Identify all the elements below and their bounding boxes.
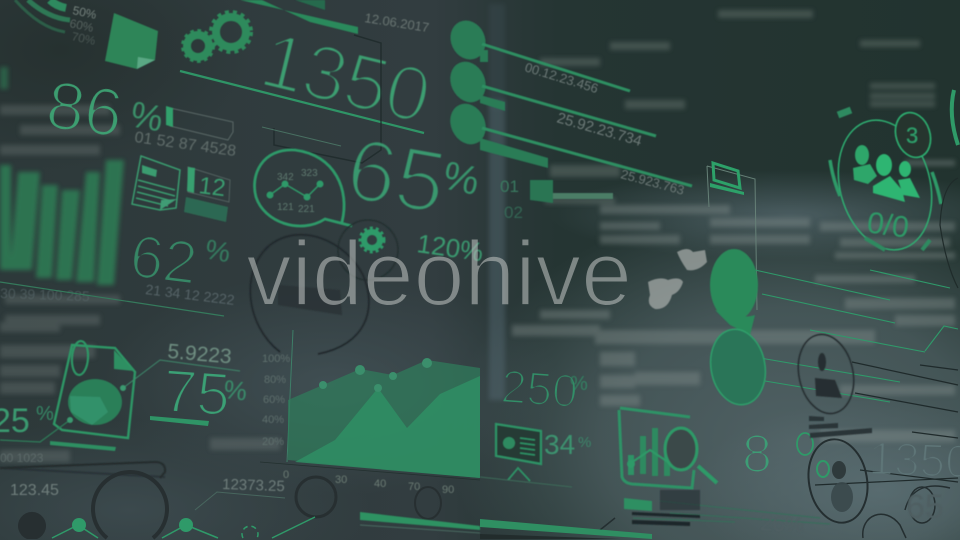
label 5.9223: 5.9223 [167, 340, 233, 369]
gear and ring [338, 220, 398, 280]
date label: 12.06.2017 [364, 10, 430, 35]
gauge percent labels [68, 3, 98, 48]
time label lower left: 30 39 100 285 [0, 285, 90, 304]
faint numbers bottom right: 26% [760, 510, 805, 537]
chart x axis labels: 90 [442, 484, 454, 496]
time labels bottom left: 123.45 [10, 482, 59, 499]
chart x axis labels [283, 469, 454, 496]
label 25 percent [0, 402, 54, 440]
ring gauge fragment, top left [15, 0, 70, 32]
time label lower left [0, 281, 236, 308]
icon: magnifier over bar chart [619, 408, 717, 488]
big number 62 percent: % [203, 233, 233, 268]
big number 62 percent [126, 222, 233, 297]
dark status bars [809, 416, 872, 438]
time code label: 01 52 87 4528 [133, 129, 237, 160]
chart x axis labels: 30 [335, 474, 347, 486]
chart y axis labels: 40% [262, 414, 284, 426]
green data lines right [755, 270, 958, 402]
icon rows: green ellipses with sliders: 25.92.23.734 [555, 110, 644, 150]
area chart [260, 330, 480, 480]
side index numbers: 02 [504, 203, 523, 222]
icon: speech bubble with line chart: 342 [277, 172, 294, 183]
label 120 percent: 120% [415, 228, 485, 267]
chart x axis labels: 70 [408, 481, 420, 493]
big number 65 percent: % [439, 154, 483, 204]
digit 8: 8 [742, 424, 772, 484]
big number 65 percent: 65 [340, 118, 453, 233]
green bar bottom centre [360, 512, 480, 533]
icon: sticky note [105, 13, 158, 69]
chart y axis labels: 60% [263, 394, 285, 406]
icon: gears [183, 12, 251, 61]
big number 75 percent: % [222, 374, 249, 406]
chart y axis labels: 100% [262, 353, 290, 365]
network nodes bottom [52, 517, 315, 538]
counter box 12: 12 [197, 172, 227, 202]
divider line lower left [0, 282, 224, 316]
counter box 12 [184, 167, 230, 222]
connector under 12373.25 [195, 492, 285, 510]
dark bracket lines [262, 35, 381, 163]
icon: team in ring: 0/0 [865, 206, 911, 245]
icon: presentation board [480, 424, 572, 487]
battery meter [166, 106, 233, 140]
side index numbers [500, 177, 523, 222]
gauge percent labels: 70% [70, 29, 97, 48]
small green marker and dark strips bottom [624, 490, 830, 526]
chart y axis labels: 80% [264, 374, 286, 386]
big number 1350: 1350 [253, 15, 438, 140]
faint numbers bottom right: 65 [906, 488, 944, 526]
time labels bottom left [0, 451, 285, 499]
dark data lines right [815, 362, 958, 485]
icon: team in ring [824, 108, 946, 260]
icon: speech bubble with line chart [255, 150, 352, 226]
chart y axis labels [262, 353, 290, 448]
big number 62 percent: 62 [126, 222, 201, 297]
gauge percent labels: 50% [71, 3, 98, 22]
chart x axis labels: 0 [283, 469, 289, 481]
green blobs centre right [705, 249, 771, 409]
gauge percent labels: 60% [68, 16, 95, 35]
bar chart, left [0, 67, 124, 285]
green bar bottom right [480, 519, 652, 539]
chart y axis labels: 20% [262, 436, 284, 448]
side index numbers: 01 [500, 177, 519, 196]
watermark logo mark [648, 249, 707, 309]
time labels bottom left: 12373.25 [222, 476, 285, 495]
small green row marker [530, 180, 613, 203]
dark rings bottom right [600, 486, 950, 538]
icon: speech bubble with line chart: 121 [277, 202, 294, 213]
label 250 percent: % [570, 373, 588, 395]
dark ring with person [791, 329, 861, 419]
icon: team in ring: 3 [906, 123, 918, 148]
icon rows: green ellipses with sliders: 25.923.763 [619, 166, 686, 198]
time labels bottom left: 00 1023 [0, 451, 44, 465]
underline below 1350 [180, 71, 424, 133]
watermark logo wordmark: videohive [246, 223, 632, 325]
label 250 percent: 250 [499, 360, 579, 417]
top green stripe [240, 0, 358, 34]
small digit 0 and tick [797, 433, 829, 477]
big number 75 percent: 75 [161, 357, 232, 429]
label 34 percent: 34 [544, 429, 575, 460]
icon rows: green ellipses with sliders [444, 15, 692, 198]
dark rings bottom row [18, 472, 441, 539]
big number 86 percent: 86 [42, 67, 127, 152]
label 34 percent: % [578, 434, 591, 451]
dark ring with pie and pale 1350 [802, 432, 960, 527]
icon: laptop in frame [707, 163, 757, 310]
chart x axis labels: 40 [374, 478, 386, 490]
icon: document [132, 156, 180, 210]
big number 86 percent [42, 67, 166, 152]
time label lower left: 21 34 12 2222 [145, 281, 236, 308]
dark bracket bar, bottom left [0, 462, 165, 478]
dark ring with play shape [250, 235, 369, 354]
icon: speech bubble with line chart: 221 [298, 204, 315, 215]
icon rows: green ellipses with sliders: 00.12.23.456 [523, 60, 600, 96]
faint numbers bottom right [760, 488, 944, 537]
right edge green arc [940, 90, 958, 288]
label 34 percent [544, 429, 591, 460]
icon: speech bubble with line chart: 323 [301, 168, 318, 179]
icon: clipped report with pie [0, 340, 240, 451]
big number 86 percent: % [128, 94, 166, 139]
label 25 percent: % [36, 403, 54, 425]
